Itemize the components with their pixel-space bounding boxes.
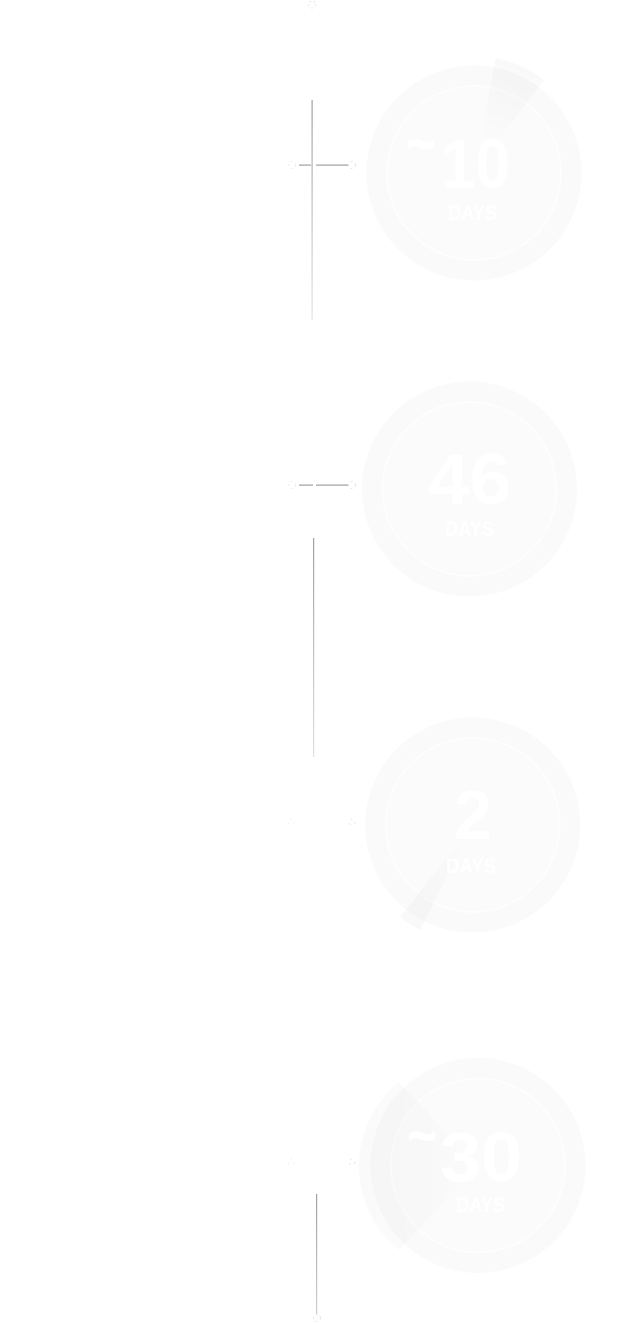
badge: about 10 days: DAYS xyxy=(448,202,497,225)
badge: 2 days xyxy=(365,718,580,932)
badge: about 10 days xyxy=(366,58,582,280)
timeline connector 2 xyxy=(288,482,356,488)
badge: about 10 days: 10 xyxy=(441,125,510,203)
badge: about 30 days xyxy=(359,1058,586,1273)
badge: 46 days: 46 xyxy=(428,440,511,520)
badge: 46 days: DAYS xyxy=(445,518,494,541)
top timeline node xyxy=(308,1,316,8)
badge: about 10 days: ~ xyxy=(407,118,435,171)
timeline segment 4 xyxy=(288,1159,355,1322)
timeline segment 3 xyxy=(288,538,355,825)
badge: 46 days xyxy=(362,382,577,596)
timeline segment 1 xyxy=(288,100,356,320)
badge: about 30 days: 30 xyxy=(440,1118,522,1196)
badge: about 30 days: ~ xyxy=(408,1110,436,1163)
badge: about 30 days: DAYS xyxy=(456,1194,505,1217)
badge: 2 days: DAYS xyxy=(446,855,496,878)
badge: 2 days: 2 xyxy=(454,776,492,854)
